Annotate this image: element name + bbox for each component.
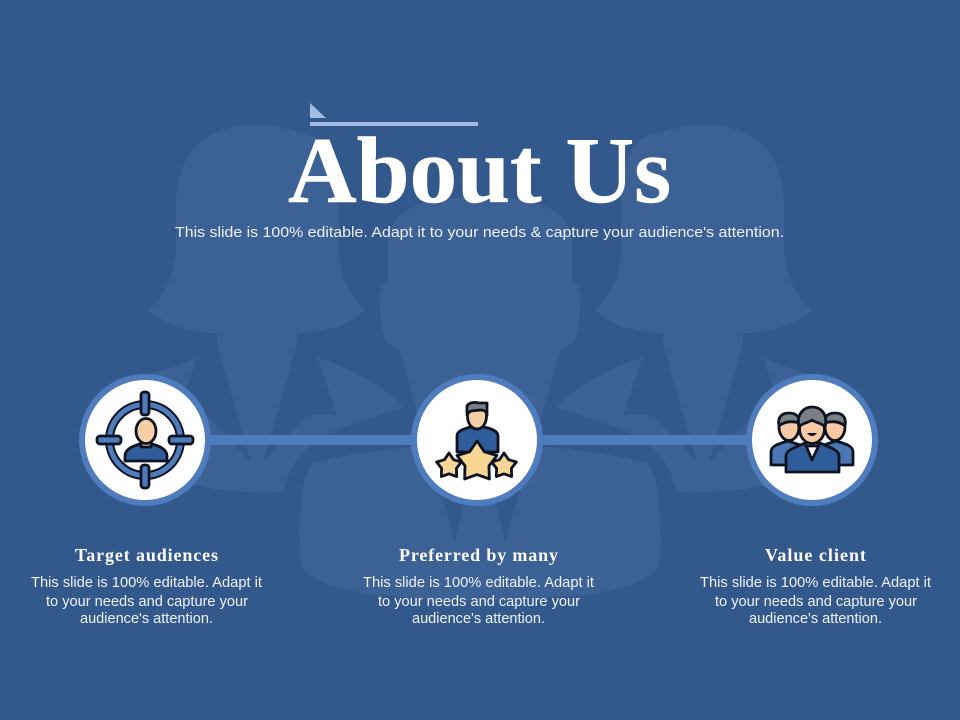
body text: audience's attention. [749,610,882,627]
circle badge [749,377,875,503]
node: preferred by many [414,377,540,503]
body text: audience's attention. [80,610,213,627]
connector line [145,435,812,445]
silhouette: left woman [110,125,403,492]
body text: This slide is 100% editable. Adapt it [363,574,595,591]
text block: target audiences [31,545,263,627]
icon: target on person [97,392,193,488]
subtitle: This slide is 100% editable. Adapt it to your needs & capture your audience's attention. [175,224,784,241]
silhouette: centre person [299,197,661,600]
text block: preferred by many [363,545,595,627]
centre collar wedges [440,490,520,542]
body text [700,574,932,627]
heading: Value client [765,545,866,565]
node: target audiences [82,377,208,503]
silhouette: right woman [557,125,850,492]
title accent: bar [310,122,478,126]
body text: audience's attention. [412,610,545,627]
circle badge [414,377,540,503]
body text: to your needs and capture your [378,593,580,610]
body text: to your needs and capture your [715,593,917,610]
circle badge [82,377,208,503]
text block: value client [700,545,932,627]
icon: group of three people [771,407,853,472]
body text [363,574,595,627]
heading: Target audiences [75,545,218,565]
title accent: triangle [310,103,326,118]
node: value client [749,377,875,503]
title: About Us [288,119,671,223]
body text: This slide is 100% editable. Adapt it [700,574,932,591]
heading: Preferred by many [399,545,558,565]
body text: to your needs and capture your [46,593,248,610]
body text [31,574,263,627]
background silhouettes of three people [110,125,850,600]
body text: This slide is 100% editable. Adapt it [31,574,263,591]
icon: person with three stars [437,402,516,479]
